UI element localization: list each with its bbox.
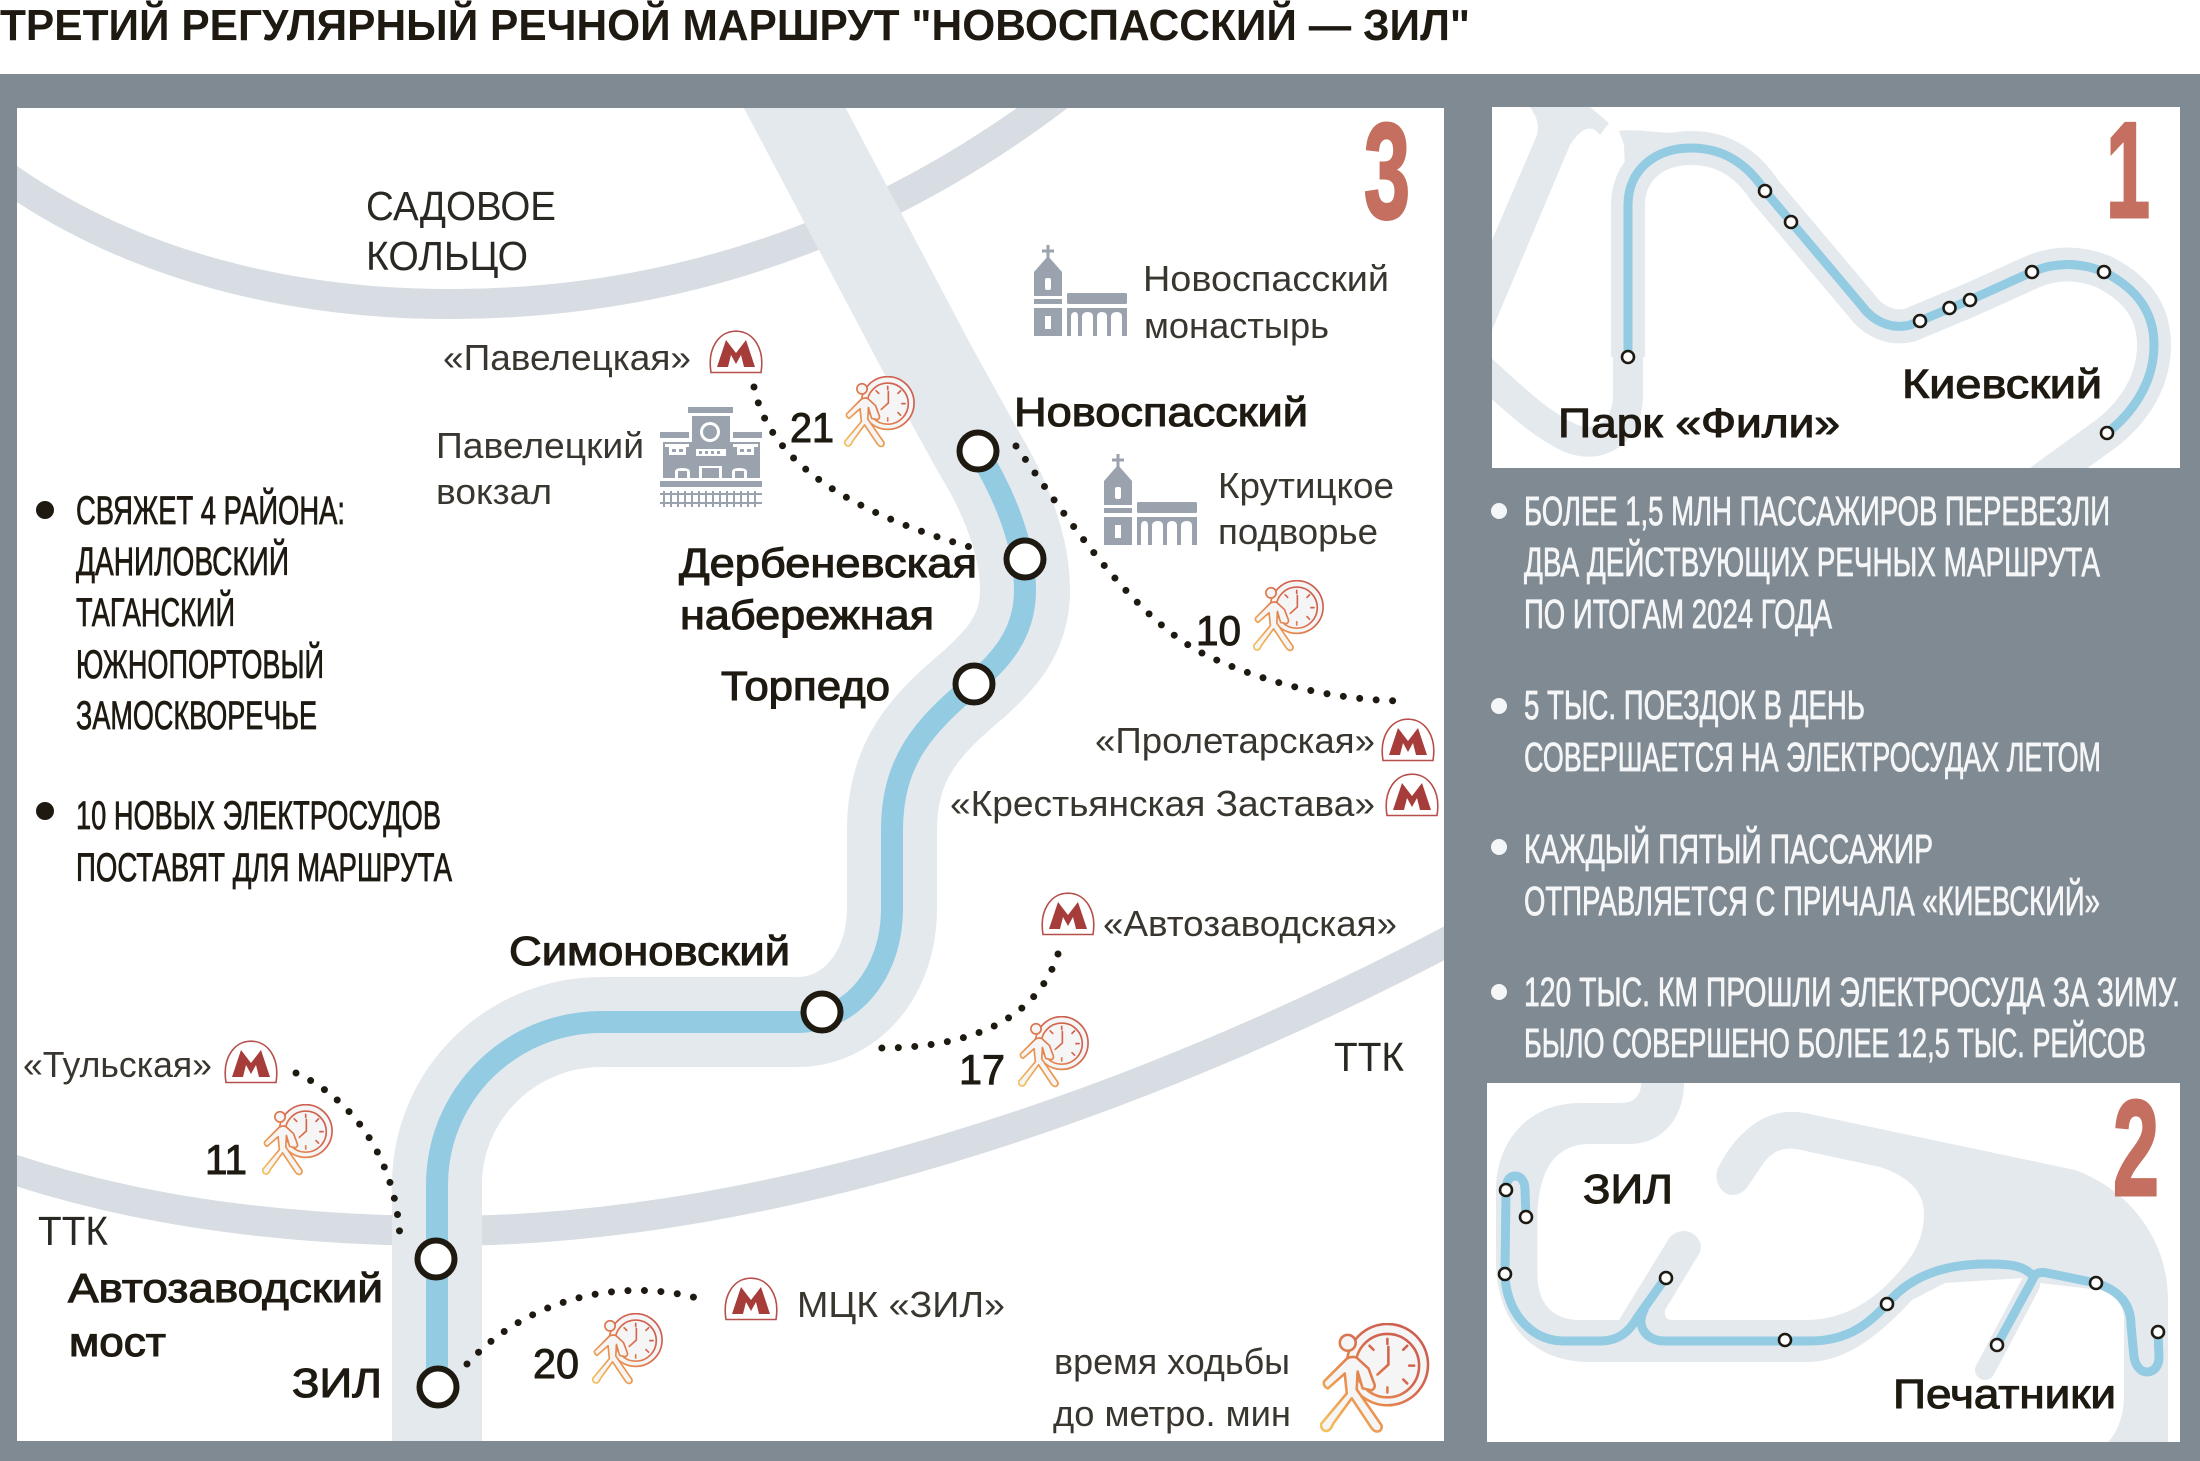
- river: [437, 80, 1025, 1460]
- landmark: Novospassky monastery: [1034, 245, 1389, 346]
- walking path dots: Paveletskaya: [754, 387, 977, 549]
- Sadovoe ring road: [0, 95, 1060, 304]
- walk time 17: 17: [959, 1046, 1005, 1093]
- pier: Avtozavodsky bridge: [418, 1240, 454, 1278]
- panel number 1: 1: [2106, 94, 2150, 246]
- metro: MCC ZIL: [725, 1278, 1005, 1325]
- walk time 11: 11: [205, 1136, 247, 1183]
- station names: Дербеневская: [679, 540, 977, 586]
- label: Sadovoe koltso: КОЛЬЦО: [366, 233, 528, 279]
- bullet list: districts: ЮЖНОПОРТОВЫЙ: [76, 641, 324, 687]
- landmark: Paveletsky station: вокзал: [436, 471, 552, 512]
- walking path dots: MCC ZIL: [467, 1290, 704, 1364]
- metro: Avtozavodskaya: «Автозаводская»: [1103, 903, 1397, 944]
- walk time 10: 10: [1196, 607, 1241, 654]
- landmark: Krutitskoe podvorye: Крутицкое: [1218, 465, 1394, 506]
- metro: Krestyanskaya Zastava: «Крестьянская Застава»: [950, 783, 1375, 824]
- metro: Krestyanskaya Zastava: [950, 774, 1438, 824]
- route line 2: [1505, 1176, 2159, 1372]
- legend: walking time: время ходьбы: [1054, 1341, 1290, 1382]
- river bends: [1480, 107, 2154, 485]
- panel: route 1 map: [1480, 94, 2180, 485]
- metro: Avtozavodskaya: [1042, 893, 1397, 944]
- metro: Paveletskaya: «Павелецкая»: [443, 337, 691, 378]
- walk time 21: [790, 377, 914, 451]
- walk time 10: [1196, 581, 1323, 654]
- pier: Derbenevskaya: [1006, 540, 1044, 578]
- station names: Автозаводский: [68, 1265, 383, 1311]
- walking path dots: Avtozavodskaya: [870, 954, 1058, 1048]
- station names: Симоновский: [509, 928, 790, 974]
- landmark: Paveletsky station: [436, 407, 762, 512]
- walking path dots: Tulskaya: [296, 1073, 400, 1238]
- landmark: Krutitskoe podvorye: подворье: [1218, 511, 1378, 552]
- route line 1: [1628, 148, 2154, 433]
- walk time 20: [533, 1314, 662, 1387]
- piers route 2: [1499, 1184, 2164, 1351]
- stat: passengers: ПО ИТОГАМ 2024 ГОДА: [1524, 591, 1832, 637]
- label: Sadovoe koltso: САДОВОЕ: [366, 183, 556, 229]
- pier: ZIL: [420, 1368, 456, 1406]
- stat: winter distance: [1491, 969, 2180, 1066]
- bullet list: new vessels: 10 НОВЫХ ЭЛЕКТРОСУДОВ: [76, 794, 441, 838]
- walk time 11: [205, 1105, 332, 1183]
- pier: Novospassky: [960, 432, 996, 470]
- metro: MCC ZIL: МЦК «ЗИЛ»: [797, 1284, 1005, 1325]
- stat: passengers: [1491, 488, 2110, 637]
- walk time 20: 20: [533, 1340, 579, 1387]
- station names: набережная: [680, 592, 934, 638]
- bullet list: new vessels: [36, 794, 452, 890]
- route line: [437, 451, 1025, 1387]
- stat: trips per day: [1491, 682, 2101, 780]
- bullet list: new vessels: ПОСТАВЯТ ДЛЯ МАРШРУТА: [76, 846, 452, 890]
- label: Kievsky: Киевский: [1902, 361, 2102, 407]
- metro: Paveletskaya: [443, 331, 762, 378]
- label: TTK left: ТТК: [38, 1208, 108, 1254]
- walk time 17: [959, 1017, 1088, 1093]
- stat: every fifth passenger: КАЖДЫЙ ПЯТЫЙ ПАССАЖИР: [1524, 826, 1933, 872]
- text block: statistics: [1491, 488, 2180, 1066]
- bullet list: districts: [36, 487, 345, 738]
- label: ZIL: ЗИЛ: [1583, 1166, 1673, 1212]
- walking path dots: Proletarskaya: [1016, 446, 1408, 701]
- stat: trips per day: 5 ТЫС. ПОЕЗДОК В ДЕНЬ: [1524, 682, 1865, 728]
- panel: route 2 map: [1487, 1072, 2180, 1442]
- label: Pechatniki: Печатники: [1893, 1371, 2116, 1417]
- panel: route 3 map: [0, 80, 1460, 1460]
- label: Sadovoe koltso: [366, 183, 556, 279]
- river bends: [1496, 1083, 2168, 1442]
- TTK ring road: [0, 935, 1460, 1231]
- pier: Simonovsky: [804, 994, 840, 1030]
- bullet list: districts: СВЯЖЕТ 4 РАЙОНА:: [76, 487, 345, 533]
- title: ТРЕТИЙ РЕГУЛЯРНЫЙ РЕЧНОЙ МАРШРУТ "НОВОСПАССКИЙ — ЗИЛ": [0, 0, 1470, 50]
- station names: Торпедо: [721, 663, 890, 709]
- landmark: Novospassky monastery: Новоспасский: [1143, 258, 1389, 299]
- pier: Torpedo: [956, 666, 992, 702]
- panel number 2: 2: [2113, 1072, 2159, 1224]
- station names: Новоспасский: [1014, 389, 1308, 435]
- panel number 3: 3: [1364, 95, 1410, 247]
- landmark: Krutitskoe podvorye: [1104, 454, 1394, 552]
- station names: ЗИЛ: [292, 1360, 382, 1406]
- piers route 1: [1622, 185, 2113, 439]
- landmark: Novospassky monastery: монастырь: [1144, 305, 1329, 346]
- legend: walking time: [1053, 1324, 1428, 1434]
- stat: every fifth passenger: [1491, 826, 2100, 924]
- label: Park Fili: Парк «Фили»: [1558, 400, 1840, 446]
- legend: walking time: до метро. мин: [1053, 1393, 1291, 1434]
- icon: railway station: [660, 407, 762, 507]
- metro: Tulskaya: «Тульская»: [23, 1044, 212, 1085]
- bullet list: districts: ЗАМОСКВОРЕЧЬЕ: [76, 694, 317, 738]
- landmark: Paveletsky station: Павелецкий: [436, 425, 644, 466]
- bullet list: districts: ТАГАНСКИЙ: [76, 589, 235, 635]
- label: TTK right: ТТК: [1334, 1034, 1404, 1080]
- station names: мост: [69, 1319, 166, 1365]
- walk time 21: 21: [790, 404, 834, 451]
- metro: Proletarskaya: «Пролетарская»: [1095, 720, 1375, 761]
- station names: [68, 389, 1308, 1406]
- bullet list: districts: ДАНИЛОВСКИЙ: [76, 538, 289, 584]
